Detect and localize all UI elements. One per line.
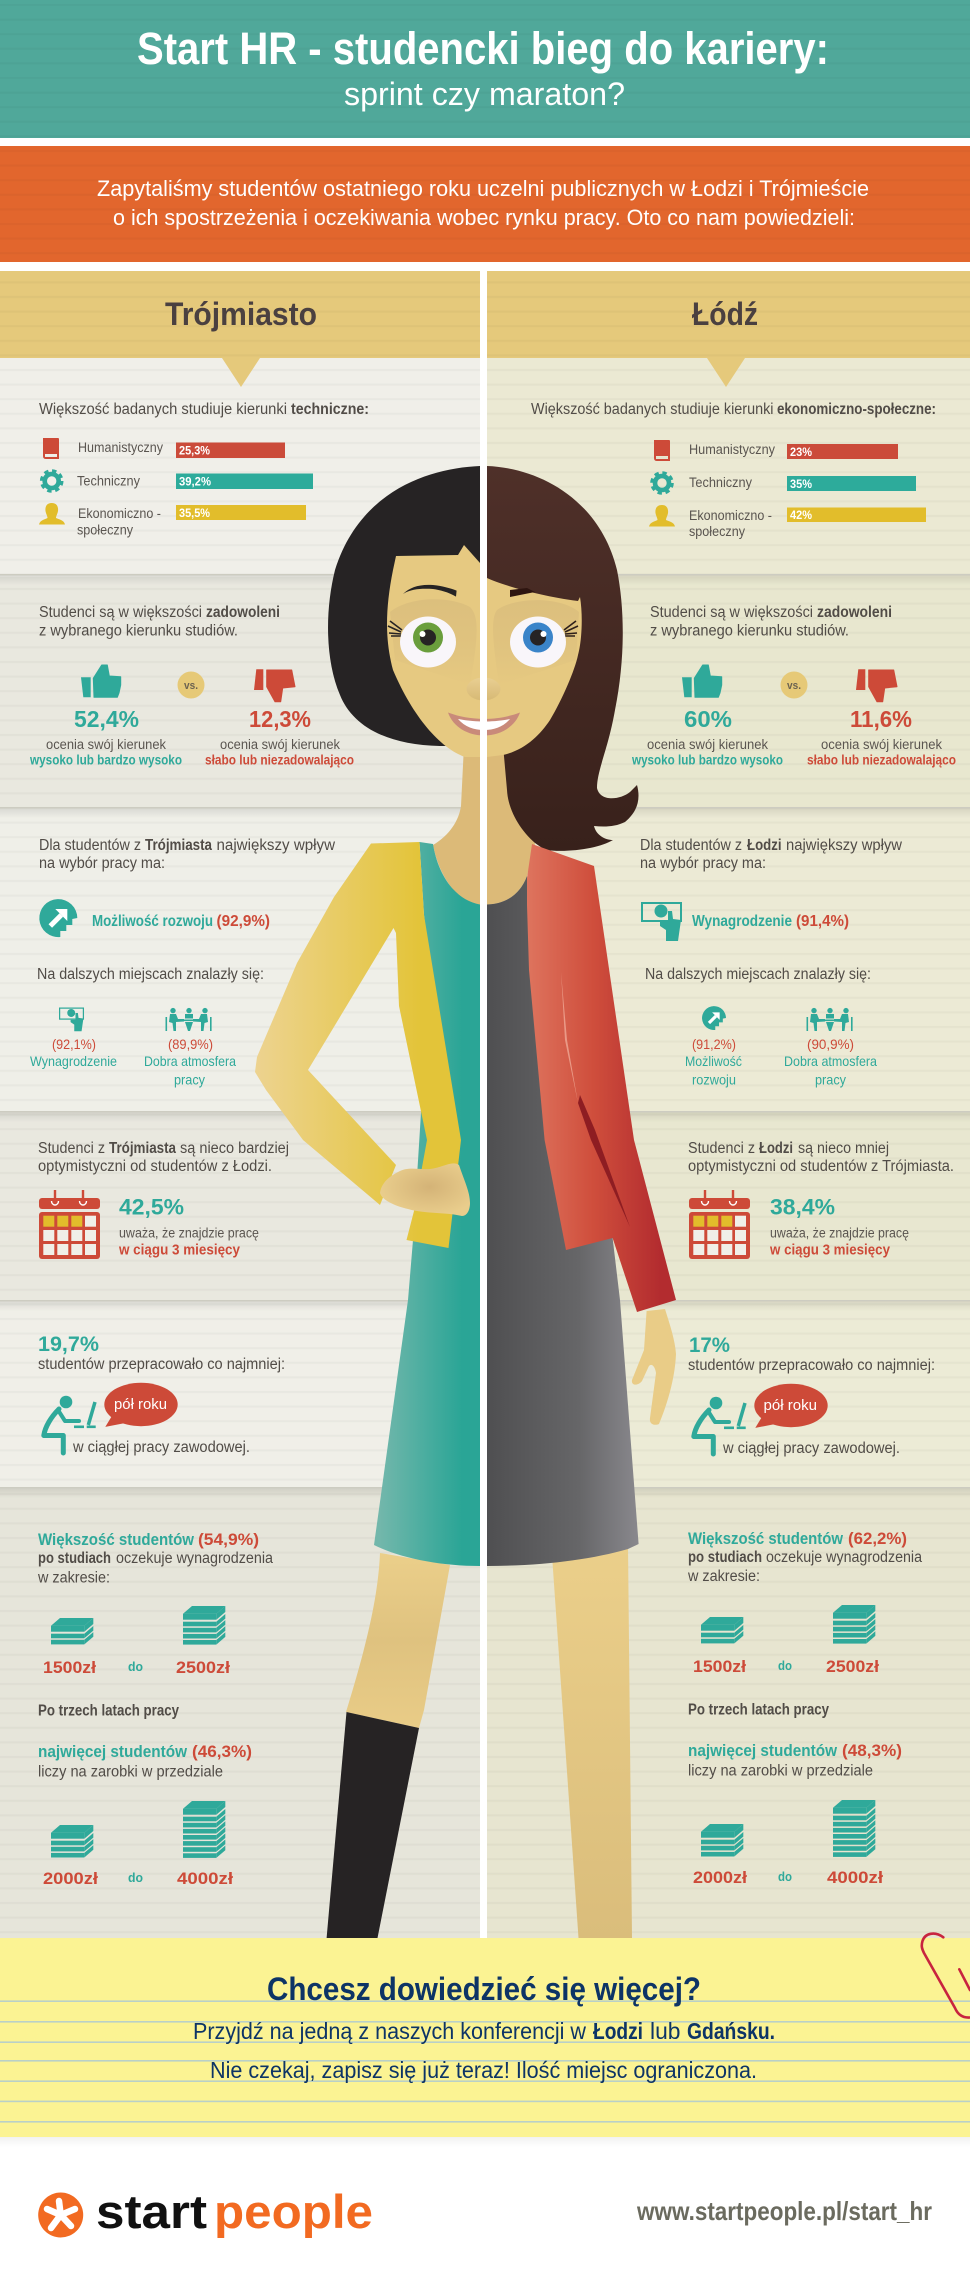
salary range: 1500zł <box>693 1657 746 1676</box>
stat: positive <box>631 706 783 768</box>
right eyebrow <box>510 588 535 597</box>
icon: person at desk <box>694 1397 746 1454</box>
heading: Trójmiasto <box>0 271 480 387</box>
text block: optymistyczni od studentów z Łodzi. <box>38 1158 272 1175</box>
icon: calendar <box>39 1190 100 1259</box>
section 6 right: salary expectations <box>687 1529 922 1887</box>
heading: Trójmiasto: Trójmiasto <box>165 296 317 332</box>
stat: negative: 11,6% <box>850 706 912 732</box>
salary range: 4000zł <box>177 1869 233 1888</box>
icon: stack large <box>183 1606 225 1645</box>
stat: 38,4% <box>770 1194 835 1220</box>
text block: Studenci z <box>688 1140 755 1157</box>
text block: liczy na zarobki w przedziale <box>38 1764 223 1780</box>
text block: Studenci są w większości <box>39 604 202 621</box>
text block: największy wpływ <box>216 837 336 854</box>
heading: Łódź: Łódź <box>692 296 758 332</box>
text block <box>688 1741 902 1780</box>
callout bubble <box>104 1383 178 1427</box>
text block: Większość studentów <box>688 1529 844 1548</box>
left leg <box>346 1553 450 1728</box>
intro text: o ich spostrzeżenia i oczekiwania wobec rynku pracy. Oto co nam powiedzieli: <box>113 205 855 230</box>
factor: atmosphere: pracy <box>174 1072 205 1088</box>
icon: stack small <box>51 1618 93 1644</box>
header banner <box>0 0 970 138</box>
text block: największy wpływ <box>786 837 903 854</box>
label: Humanistyczny <box>78 440 163 455</box>
factor: salary: Wynagrodzenie <box>30 1053 117 1069</box>
vs badge: vs. <box>787 680 801 692</box>
logo mark <box>38 2192 83 2238</box>
text block: po studiach <box>688 1549 762 1566</box>
text block: Łodzi <box>759 1140 793 1157</box>
salary range: do <box>128 1659 143 1674</box>
text line 1: Przyjdź na jedną z naszych konferencji w <box>193 2018 586 2044</box>
text block: Łodzi <box>747 837 782 854</box>
paperclip <box>922 1934 970 2018</box>
bar: humanistic: 25,3% <box>179 444 210 458</box>
text block: liczy na zarobki w przedziale <box>688 1762 873 1780</box>
mouth <box>448 712 520 736</box>
icon: stack small <box>701 1824 743 1856</box>
text line 1: Gdańsku. <box>687 2018 775 2044</box>
left face <box>387 545 480 757</box>
section 4 left: job search optimism <box>38 1140 289 1259</box>
vs badge: vs. <box>184 680 198 692</box>
text block: (62,2%) <box>848 1529 907 1548</box>
top factor: (91,4%) <box>796 913 849 930</box>
caption: w ciągłej pracy zawodowej. <box>72 1439 250 1456</box>
icon: stack large <box>183 1801 225 1858</box>
bar: humanistic <box>787 444 898 459</box>
icon: thumb down <box>856 669 897 702</box>
icon: thumb down <box>254 669 295 702</box>
text block: na wybór pracy ma: <box>39 855 165 872</box>
panel: call to action note <box>0 1934 970 2147</box>
bar: economic: 42% <box>790 508 812 522</box>
text block: najwięcej studentów <box>688 1741 838 1760</box>
text line 2: Nie czekaj, zapisz się już teraz! Ilość miejsc ograniczona. <box>210 2057 757 2083</box>
icon: calendar <box>689 1190 750 1259</box>
text block: studentów przepracowało co najmniej: <box>38 1356 285 1373</box>
text block: Większość badanych studiuje kierunki <box>531 401 774 418</box>
right hand <box>632 1309 676 1425</box>
text line 1: Łodzi <box>593 2018 643 2044</box>
icon: growth arrow <box>702 1006 726 1030</box>
stat: positive: ocenia swój kierunek <box>647 737 768 752</box>
left sock <box>327 1712 419 1938</box>
text block <box>39 604 280 640</box>
vs badge <box>780 672 808 698</box>
icon: growth arrow <box>39 899 77 937</box>
text block: z wybranego kierunku studiów. <box>39 622 238 640</box>
stat: negative: ocenia swój kierunek <box>220 737 340 752</box>
text block: Większość studentów <box>38 1530 195 1549</box>
salary range: 2500zł <box>176 1658 230 1677</box>
callout bubble: pół roku <box>114 1396 167 1413</box>
stat: uważa, że znajdzie pracę <box>770 1226 909 1240</box>
text block: Dla studentów z <box>640 837 742 854</box>
text line 1: lub <box>650 2018 680 2044</box>
icon: stack large <box>833 1800 875 1857</box>
icon: salary <box>60 1008 83 1031</box>
stat: negative: 12,3% <box>249 706 311 732</box>
icon: stack large <box>833 1605 875 1644</box>
text block: (48,3%) <box>842 1741 902 1760</box>
stat <box>118 1194 259 1258</box>
text block <box>37 1530 273 1586</box>
website url: www.startpeople.pl/start_hr <box>636 2196 932 2226</box>
factor: atmosphere: (90,9%) <box>807 1036 854 1052</box>
intro text: Zapytaliśmy studentów ostatniego roku uczelni publicznych w Łodzi i Trójmieście <box>97 176 869 201</box>
wordmark: people <box>214 2185 373 2238</box>
text block: Trójmiasta <box>109 1140 176 1157</box>
label: społeczny <box>77 522 133 538</box>
text block <box>687 1529 922 1585</box>
stat: negative <box>807 706 956 768</box>
text block: są nieco mniej <box>798 1140 889 1157</box>
text block: Studenci z <box>38 1140 105 1157</box>
callout bubble <box>754 1384 828 1428</box>
icon: team <box>166 1008 212 1031</box>
salary range: 4000zł <box>827 1868 883 1887</box>
subheading: Po trzech latach pracy <box>688 1702 829 1718</box>
text block: na wybór pracy ma: <box>640 855 766 872</box>
left eyebrow <box>403 585 457 597</box>
icon: thumb up <box>81 665 121 697</box>
heading: Chcesz dowiedzieć się więcej? <box>267 1971 701 2007</box>
factor: atmosphere: Dobra atmosfera <box>144 1053 236 1069</box>
stat: positive: 60% <box>684 706 732 732</box>
factor: atmosphere: (89,9%) <box>168 1036 213 1052</box>
text block <box>688 1334 935 1374</box>
bar: economic <box>787 508 926 522</box>
intro band <box>0 146 970 262</box>
illustration: woman split in two halves <box>255 466 676 1938</box>
icon: person <box>39 503 65 524</box>
text block <box>640 837 903 872</box>
stat: positive: 52,4% <box>74 706 139 732</box>
section 5 right: work experience <box>688 1334 935 1457</box>
salary range <box>693 1657 879 1676</box>
left hair <box>328 466 480 746</box>
bar: technical <box>787 476 916 491</box>
subtitle: sprint czy maraton? <box>344 76 625 112</box>
heading: Łódź <box>487 271 970 387</box>
text block <box>531 401 936 418</box>
stat: positive: ocenia swój kierunek <box>46 737 166 752</box>
icon: thumb up <box>682 665 722 697</box>
text block: ekonomiczno-społeczne: <box>777 401 936 418</box>
salary range: do <box>778 1658 792 1673</box>
label: Ekonomiczno - <box>689 508 772 523</box>
stat: uważa, że znajdzie pracę <box>119 1226 259 1240</box>
caption: w ciągłej pracy zawodowej. <box>722 1440 900 1457</box>
factor: growth: Możliwość <box>685 1053 742 1069</box>
right hair <box>487 466 638 851</box>
right neck <box>487 745 535 904</box>
bar: technical: 35% <box>790 477 812 491</box>
gray dress <box>487 876 639 1566</box>
salary range: do <box>128 1870 143 1885</box>
left neck <box>433 745 480 904</box>
icon: book <box>654 440 670 461</box>
top factor: (92,9%) <box>216 913 270 930</box>
salary range <box>43 1869 233 1888</box>
text block <box>39 837 336 872</box>
text block: oczekuje wynagrodzenia <box>116 1550 273 1567</box>
nose <box>466 678 500 700</box>
subheading: Na dalszych miejscach znalazły się: <box>37 966 264 983</box>
subheading: Na dalszych miejscach znalazły się: <box>645 966 871 983</box>
text block: 19,7% <box>38 1333 99 1356</box>
red jacket <box>527 844 676 1312</box>
section 6 left: salary expectations <box>37 1530 273 1888</box>
intro text <box>97 176 869 230</box>
stat: positive: wysoko lub bardzo wysoko <box>631 752 783 768</box>
icon: salary <box>642 903 681 941</box>
yellow cardigan <box>255 842 461 1248</box>
text block <box>38 1333 285 1373</box>
stat <box>769 1194 909 1258</box>
label: Techniczny <box>689 475 752 490</box>
salary range: 2000zł <box>693 1868 747 1887</box>
right eye <box>510 616 578 668</box>
subheading: Po trzech latach pracy <box>38 1702 179 1720</box>
vs badge <box>178 672 204 698</box>
top factor: Wynagrodzenie <box>692 913 792 930</box>
text block: po studiach <box>38 1550 111 1567</box>
text block <box>688 1140 954 1175</box>
salary range <box>693 1868 883 1887</box>
text block: z wybranego kierunku studiów. <box>650 622 849 640</box>
icon: stack small <box>701 1617 743 1643</box>
text block <box>38 1140 289 1175</box>
factor: atmosphere <box>144 1036 236 1088</box>
icon: stack small <box>51 1825 93 1858</box>
text block: w zakresie: <box>687 1568 760 1585</box>
title: Start HR - studencki bieg do kariery: <box>137 23 829 74</box>
salary range: 2500zł <box>826 1657 879 1676</box>
factor: growth: rozwoju <box>692 1072 736 1088</box>
icon: gear <box>652 473 672 493</box>
text block: oczekuje wynagrodzenia <box>766 1549 922 1566</box>
salary range <box>43 1658 230 1677</box>
factor: growth: (91,2%) <box>692 1036 736 1052</box>
icon: gear <box>41 471 62 491</box>
label: społeczny <box>689 524 745 539</box>
callout bubble: pół roku <box>764 1397 817 1414</box>
icon: team <box>806 1008 853 1031</box>
stat: positive <box>29 706 182 768</box>
text block: Trójmiasta <box>145 837 212 854</box>
top factor: Możliwość rozwoju <box>92 913 213 930</box>
stat: 42,5% <box>119 1194 184 1220</box>
right leg <box>552 1545 632 1938</box>
label <box>689 508 772 539</box>
section 1 left: field of study <box>39 401 369 538</box>
salary range: 1500zł <box>43 1658 96 1677</box>
text block: Większość badanych studiuje kierunki <box>39 401 287 418</box>
label <box>77 506 161 538</box>
logo: startpeople <box>38 2185 373 2238</box>
text block <box>650 604 892 640</box>
text block: 17% <box>689 1334 730 1357</box>
section 2 left: satisfaction <box>29 604 354 768</box>
bar: technical: 39,2% <box>179 474 211 488</box>
bar: humanistic: 23% <box>790 445 812 459</box>
bar: humanistic <box>176 442 285 458</box>
section 3 left: job factors <box>30 837 336 1088</box>
stat: negative: słabo lub niezadowalająco <box>205 752 354 768</box>
right face <box>487 578 582 757</box>
text block: studentów przepracowało co najmniej: <box>688 1357 935 1374</box>
text block: (54,9%) <box>198 1530 259 1549</box>
text block: zadowoleni <box>206 604 280 621</box>
wordmark: start <box>96 2185 207 2238</box>
text block: (46,3%) <box>192 1742 252 1761</box>
text block: Dla studentów z <box>39 837 141 854</box>
label: Ekonomiczno - <box>78 506 161 521</box>
stat: negative <box>205 706 354 768</box>
text block: najwięcej studentów <box>38 1742 188 1761</box>
stat: w ciągu 3 miesięcy <box>118 1242 241 1258</box>
salary range: do <box>778 1869 792 1884</box>
text block: zadowoleni <box>817 604 892 621</box>
section 2 right: satisfaction <box>631 604 956 768</box>
icon: person <box>649 505 675 526</box>
text block: techniczne: <box>291 401 369 418</box>
stat: w ciągu 3 miesięcy <box>769 1242 891 1258</box>
text block: optymistyczni od studentów z Trójmiasta. <box>688 1158 954 1175</box>
stat: negative: ocenia swój kierunek <box>821 737 942 752</box>
factor: atmosphere: pracy <box>815 1072 846 1088</box>
label: Techniczny <box>77 474 140 488</box>
text block <box>38 1742 252 1780</box>
text block: w zakresie: <box>37 1570 110 1586</box>
section 3 right: job factors <box>640 837 903 1088</box>
section 5 left: work experience <box>38 1333 285 1456</box>
salary range: 2000zł <box>43 1869 98 1888</box>
text block: są nieco bardziej <box>180 1140 289 1157</box>
left eye <box>388 616 456 668</box>
icon: person at desk <box>44 1396 96 1453</box>
label: Humanistyczny <box>689 442 775 457</box>
factor: atmosphere: Dobra atmosfera <box>784 1053 877 1069</box>
section 1 right: field of study <box>531 401 936 539</box>
section 4 right: job search optimism <box>688 1140 954 1259</box>
teal dress <box>374 842 480 1566</box>
bar: technical <box>176 474 313 489</box>
factor: salary: (92,1%) <box>52 1036 96 1052</box>
factor: growth <box>685 1036 742 1088</box>
bar: economic <box>176 505 306 520</box>
factor: atmosphere <box>784 1036 877 1088</box>
bar: economic: 35,5% <box>179 506 210 520</box>
factor: salary <box>30 1036 117 1069</box>
wordmark <box>96 2185 373 2238</box>
text block: Studenci są w większości <box>650 604 813 621</box>
column backgrounds <box>0 358 970 1938</box>
face shading <box>390 599 579 685</box>
central white gap <box>480 271 487 1938</box>
stat: positive: wysoko lub bardzo wysoko <box>29 752 182 768</box>
left hand <box>380 1163 470 1216</box>
icon: book <box>43 438 59 459</box>
